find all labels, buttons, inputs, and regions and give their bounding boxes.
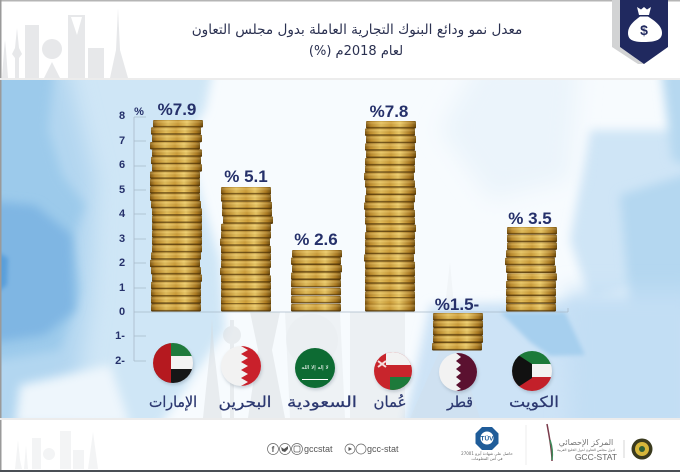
label: Kuwait value: % 3.5 xyxy=(508,209,552,228)
faded skyline behind flags xyxy=(203,312,405,418)
social handle: gccstat xyxy=(268,444,333,454)
social handle: gcc-stat xyxy=(345,444,399,454)
axis labels: 3 xyxy=(119,233,125,245)
TUV certification badge: TÜV xyxy=(480,434,494,442)
flag: Bahrain xyxy=(221,346,261,386)
GCC-STAT logo: GCC-STAT xyxy=(575,452,617,462)
title: لعام 2018م (%) xyxy=(309,44,403,59)
axis labels: % xyxy=(134,106,144,118)
country labels: عُمان xyxy=(374,393,406,411)
bar: Kuwait coin stack xyxy=(505,227,557,312)
axis labels: 2- xyxy=(115,355,125,367)
icon: ribbon with money bag: $ xyxy=(640,22,648,38)
label: Oman value: %7.8 xyxy=(370,102,408,121)
TUV certification badge xyxy=(461,427,513,461)
chart axis xyxy=(134,117,568,361)
axis labels: 0 xyxy=(119,306,125,318)
flag shadows xyxy=(154,345,553,393)
country labels: الكويت xyxy=(509,393,559,411)
axis labels: 2 xyxy=(119,257,125,269)
country labels: البحرين xyxy=(218,393,272,411)
axis labels: 1 xyxy=(119,282,125,294)
bar: Oman coin stack xyxy=(364,121,416,312)
flag: Saudi Arabia xyxy=(295,348,335,388)
label: Qatar value: %1.5- xyxy=(435,295,479,314)
title: معدل نمو ودائع البنوك التجارية العاملة بدول مجلس التعاون xyxy=(192,22,522,38)
social handle: gccstat: f xyxy=(272,445,275,454)
title xyxy=(192,22,522,59)
axis labels xyxy=(115,106,144,367)
country labels: الإمارات xyxy=(149,393,197,411)
GCC-STAT logo xyxy=(547,424,624,462)
country labels: السعودية xyxy=(287,393,357,411)
flag: Saudi Arabia: لا إله إلا الله xyxy=(301,365,329,371)
watercolor background panel xyxy=(2,80,680,418)
bar: Bahrain coin stack xyxy=(220,187,273,312)
bar: UAE coin stack xyxy=(150,120,203,312)
flag: Qatar xyxy=(439,353,477,391)
TUV certification badge: في أمن المعلومات xyxy=(471,456,503,461)
header skyline xyxy=(2,8,128,78)
icon: ribbon with money bag xyxy=(612,0,668,64)
axis labels: 7 xyxy=(119,135,125,147)
axis labels: 4 xyxy=(119,208,126,220)
axis labels: 6 xyxy=(119,159,125,171)
social handle: gcc-stat: gcc-stat xyxy=(367,444,399,454)
country labels xyxy=(149,393,559,411)
flag: Oman xyxy=(374,352,412,390)
axis labels: 8 xyxy=(119,110,125,122)
header cutout in tower xyxy=(71,17,82,35)
divider xyxy=(525,425,527,465)
bar: Saudi coin stack xyxy=(291,250,342,312)
label: UAE value: %7.9 xyxy=(158,100,196,119)
axis labels: 5 xyxy=(119,184,125,196)
footer skyline xyxy=(15,431,98,469)
label: Saudi value: % 2.6 xyxy=(294,230,338,249)
TUV certification badge: حاصل على شهادة آيزو 27001 xyxy=(461,451,513,456)
social handle: gccstat: gccstat xyxy=(304,444,333,454)
flag: UAE xyxy=(153,343,193,383)
flag: Kuwait xyxy=(512,351,552,391)
GCC emblem xyxy=(632,438,652,460)
bar: Qatar coin stack xyxy=(432,313,483,350)
GCC-STAT logo: المركز الإحصائي xyxy=(559,438,613,448)
label: Bahrain value: % 5.1 xyxy=(224,167,268,186)
country labels: قطر xyxy=(446,393,473,411)
axis labels: 1- xyxy=(115,330,125,342)
GCC-STAT logo: لدول مجلس التعاون لدول الخليج العربية xyxy=(557,448,615,452)
